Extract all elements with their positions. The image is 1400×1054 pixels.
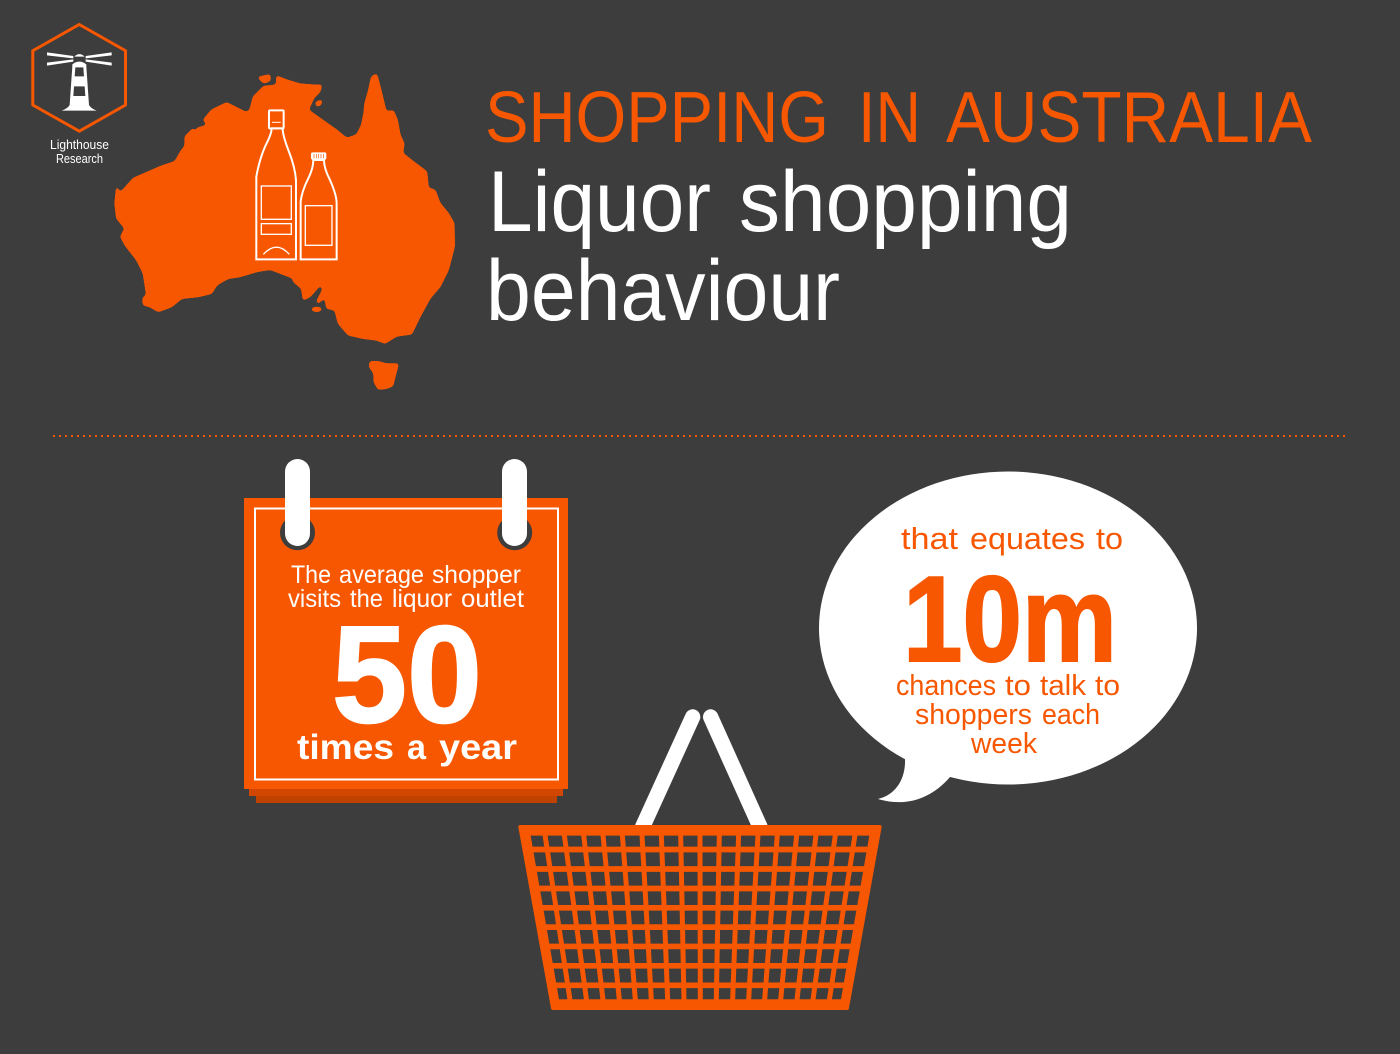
logo hexagon [33,24,125,131]
map: Kangaroo Island [311,307,322,312]
heading: shopping in Australia: IN [858,78,921,158]
calendar intro text: shopper [432,561,521,589]
bubble closing text: week [970,728,1037,760]
bubble closing text: chances [896,670,996,702]
basket mesh [531,835,869,1000]
heading: liquor shopping: Liquor [488,154,711,250]
bubble closing text: shoppers [915,699,1032,731]
calendar intro text: outlet [461,585,524,613]
statistic: 10m: 10m [903,551,1117,687]
icon: lighthouse [47,52,112,111]
heading: liquor shopping: shopping [739,154,1072,250]
bubble closing text: each [1042,699,1100,731]
logo: Lighthouse Research [33,24,125,166]
calendar back page [256,790,557,803]
bubble intro text: equates [970,521,1085,556]
speech bubble callout [819,472,1197,802]
icon: large bottle [256,110,296,259]
bubble closing text: talk [1040,670,1086,702]
title [485,78,1312,339]
logo wordmark: Research [56,152,103,166]
map of Australia with bottles [115,74,454,389]
calendar intro text: visits [288,585,341,613]
heading: shopping in Australia: AUSTRALIA [946,78,1312,158]
statistic: 50: 50 [332,598,482,752]
calendar middle page [249,785,563,796]
heading: behaviour: behaviour [486,243,840,339]
heading: shopping in Australia: SHOPPING [485,78,829,158]
calendar intro text: the [350,585,383,613]
map: Tasmania [369,362,398,389]
statistic label: times a year: a [407,728,427,767]
calendar intro text: The [291,561,331,589]
calendar right ring [497,459,532,550]
bubble intro text: to [1096,521,1123,556]
logo wordmark: Lighthouse [50,138,109,152]
basket body [520,827,880,1008]
bubble shape [819,472,1197,802]
calendar panel [244,459,568,803]
calendar intro text [288,561,524,613]
calendar intro text: average [339,561,424,589]
icon: small bottle [301,152,337,259]
basket handles [643,717,760,827]
bubble closing text [896,670,1120,760]
bubble closing text: to [1005,670,1031,702]
statistic label: times a year: year [439,728,517,767]
bubble intro text: that [901,521,958,556]
map: Melville Island [258,75,270,83]
map: landmasses [115,74,454,389]
calendar intro text: liquor [392,585,452,613]
map: Groote Eylandt [316,100,323,106]
logo wordmark [50,138,109,166]
icon: shopping basket [520,717,880,1008]
calendar front page [244,498,568,789]
map: mainland [115,74,454,343]
statistic label: times a year: times [297,728,394,767]
bubble closing text: to [1095,670,1120,702]
calendar left ring [280,459,315,550]
